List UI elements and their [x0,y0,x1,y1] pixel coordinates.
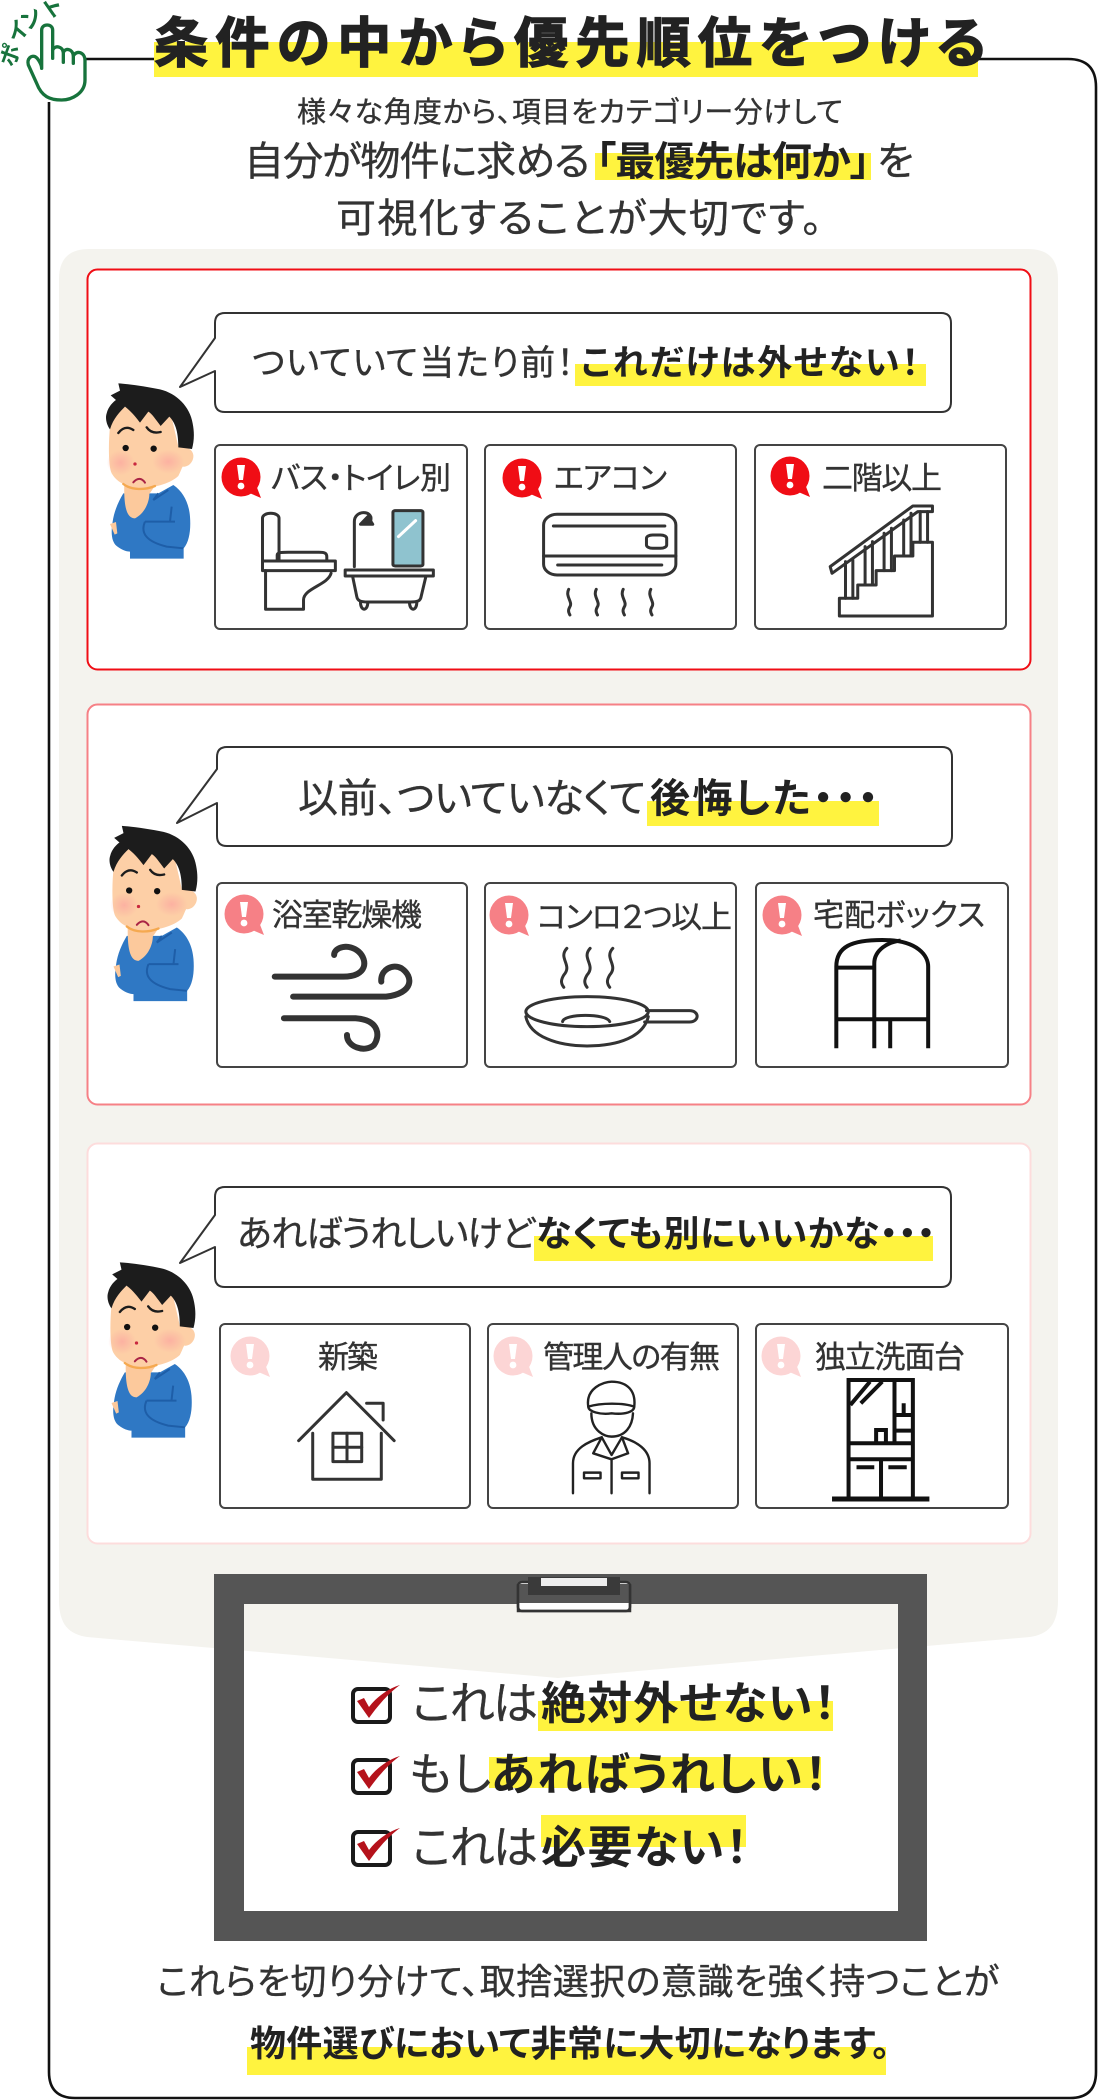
character: worried man [110,826,197,1001]
character: worried man [106,383,194,559]
card: 二階以上: 二階以上 [822,461,942,496]
title: 条件の中から優先順位をつける [154,14,986,74]
card: 新築 [220,1324,470,1508]
panel: must have [88,270,1030,670]
speech bubble: 以前、ついていなくて [298,777,646,821]
intro text: 「最優先は何か」 [596,140,870,184]
check item 3: これは [412,1822,538,1873]
card: 宅配ボックス: 宅配ボックス [813,898,985,933]
icon: building manager [573,1382,650,1493]
speech bubble: なくても別にいいかな・・・ [536,1213,935,1254]
icon: delivery box [836,940,928,1048]
icon: pointing hand with ポイント [0,0,85,100]
icon: pointing hand with ポイント: ン [15,2,48,35]
card: コンロ2つ以上 [485,883,736,1067]
icon: pointing hand with ポイント: イ [2,15,35,48]
gray background panel [59,249,1058,1678]
card: 新築: 新築 [318,1340,378,1375]
check item 2: あればうれしい！ [491,1749,827,1800]
card: 二階以上 [755,445,1006,629]
closing text [157,1961,1000,2075]
icon: stairs [830,506,932,616]
clipboard [214,1574,927,1941]
speech bubble [177,747,952,846]
intro text: を [877,140,914,184]
icon: toilet and bath [262,511,433,609]
check item 3: 必要ない！ [541,1822,748,1873]
card: 浴室乾燥機: 浴室乾燥機 [272,898,422,933]
card: バス・トイレ別 [215,445,467,629]
intro text: 自分が物件に求める [244,140,590,184]
speech bubble [180,1187,951,1287]
icon: wind [275,947,409,1049]
intro text [244,96,914,241]
intro text: 可視化することが大切です。 [336,197,822,241]
card: 宅配ボックス [756,883,1008,1067]
card: エアコン: エアコン [554,461,667,496]
icon: air conditioner [544,514,676,615]
icon: house [299,1393,394,1479]
speech bubble: 後悔した・・・ [650,777,878,821]
card: 管理人の有無: 管理人の有無 [543,1340,720,1375]
card: バス・トイレ別: バス・トイレ別 [271,461,451,496]
icon: vanity [832,1380,929,1499]
card: 浴室乾燥機 [217,883,467,1067]
check item 1 [353,1678,836,1731]
check item 2: もし [409,1749,491,1800]
speech bubble: あればうれしいけど [237,1213,536,1254]
card: 管理人の有無 [488,1324,738,1508]
check item 1: 絶対外せない！ [541,1678,836,1729]
intro text: 様々な角度から、項目をカテゴリー分けして [297,96,843,129]
speech bubble [180,313,951,412]
icon: frying pan [526,948,697,1046]
character: worried man [108,1262,195,1438]
speech bubble: これだけは外せない！ [581,344,919,383]
panel: regret [88,704,1030,1104]
speech bubble: ついていて当たり前！ [252,344,574,383]
card: 独立洗面台: 独立洗面台 [815,1340,965,1375]
check item 3 [353,1815,748,1873]
closing text: 物件選びにおいて非常に大切になります。 [250,2023,890,2064]
clip [518,1577,630,1611]
card: コンロ2つ以上: コンロ２つ以上 [537,900,732,935]
card: 独立洗面台 [756,1324,1008,1508]
closing text: これらを切り分けて、取捨選択の意識を強く持つことが [157,1961,1000,2002]
card: エアコン [485,445,736,629]
check item 1: これは [412,1678,538,1729]
panel: nice to have [88,1144,1030,1544]
